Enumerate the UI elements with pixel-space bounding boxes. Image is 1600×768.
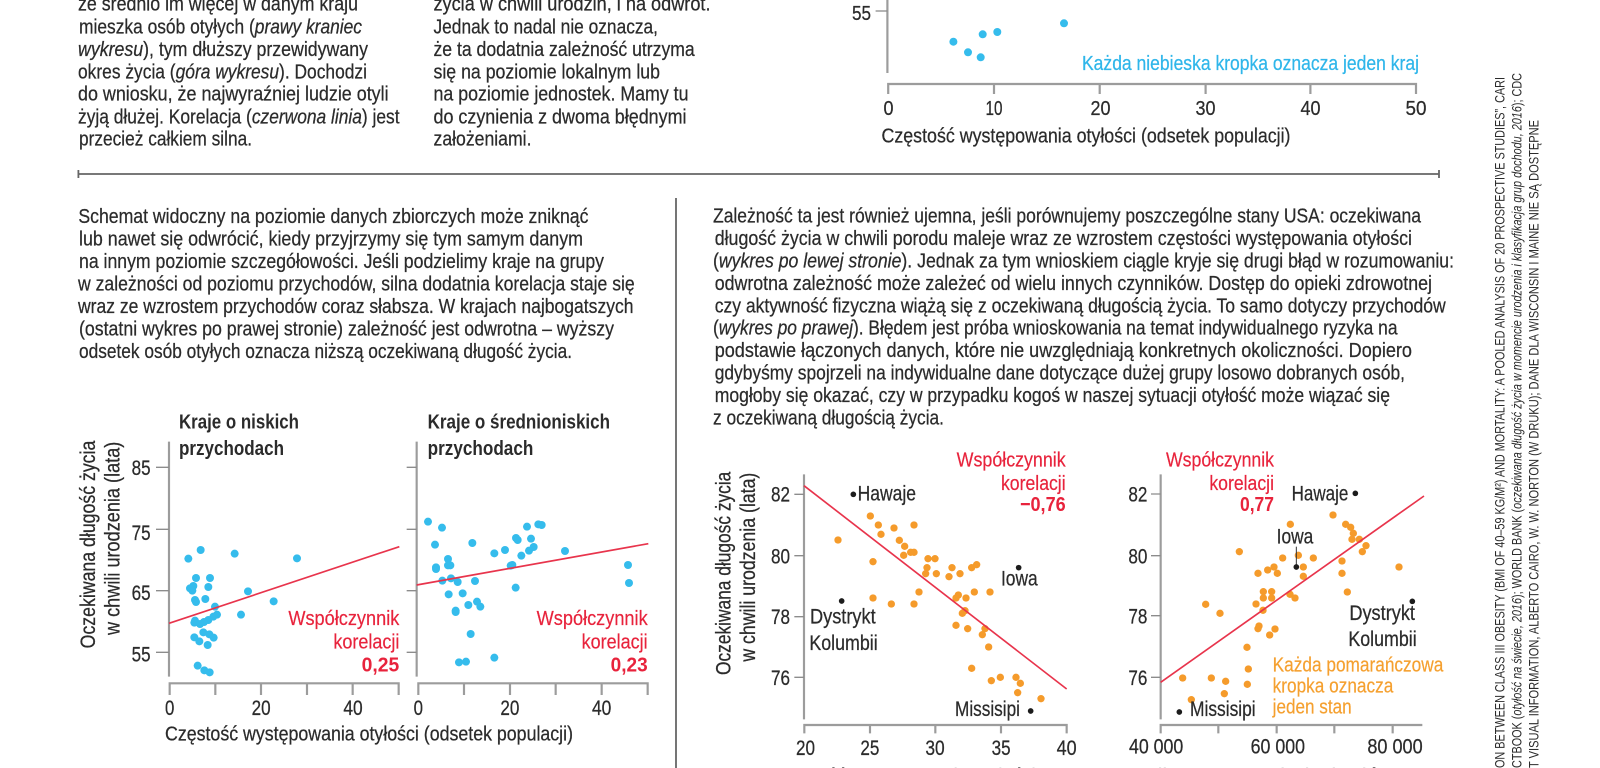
highlighted states [1176,490,1415,715]
text block: right lower paragraph [713,205,1454,429]
text block: top middle paragraph: że ta dodatnia zależność utrzyma [434,38,695,61]
data points: states [1179,511,1403,703]
y axis: 65 [132,582,151,605]
text block: top middle paragraph: do czynienia z dwoma błędnymi [434,105,686,128]
state labels: Missisipi [1190,698,1256,721]
text block: left lower paragraph: w zależności od poziomu przychodów, silna dodatnia korelacja staje się [77,272,635,296]
correlation label -0,76: Współczynnik [957,449,1066,472]
text block: left lower paragraph: Schemat widoczny na poziomie danych zbiorczych może zniknąć [78,205,588,228]
text block: top left paragraph: żyją dłużej. Korelacja (czerwona linia) jest [78,105,400,128]
chart: all countries scatter (bottom of chart): 40 [1300,97,1320,120]
x axis [1129,725,1423,758]
chart: all countries scatter (bottom of chart) [852,0,1426,148]
text block: top left paragraph: przecież całkiem silna. [79,128,252,150]
text block: left lower paragraph: na innym poziomie szczegółowości. Jeśli podzielimy kraje na grupy [79,250,605,273]
chart: all countries scatter (bottom of chart): Częstość występowania otyłości (odsetek populacji) [882,124,1290,148]
vertical column divider [675,198,677,768]
text block: top middle paragraph: założeniami. [434,128,532,150]
y axis [132,442,169,677]
text block: top middle paragraph: się na poziomie lokalnym lub [434,60,660,83]
chart: all countries scatter (bottom of chart): 10 [986,97,1002,120]
state labels: Iowa [1277,525,1314,548]
text block: right lower paragraph: podstawie łączonych danych, które nie uwzględniają konkretnych okoliczności. Dopiero [715,339,1412,362]
horizontal section divider [78,170,1439,178]
y axis [407,442,417,677]
text block: left lower paragraph: wraz ze wzrostem przychodów coraz słabsza. W krajach najbogatszych [77,295,633,318]
x axis: 40 [1057,737,1077,760]
text block: top left paragraph: mieszka osób otyłych (prawy kraniec [79,15,363,38]
sources, rotated text: T VISUAL INFORMATION, ALBERTO CAIRO, W. W. NORTON (W DRUKU); DANE DLA WISCONSIN I MAINE NIE SĄ DOSTĘPNE [1526,120,1541,768]
x axis: 20 [252,697,271,720]
text block: right lower paragraph: Zależność ta jest również ujemna, jeśli porównujemy poszczególne stany USA: oczekiwana [713,205,1422,228]
chart: lower-middle income countries [407,411,648,720]
x axis: 20 [500,697,519,720]
chart title: lower-middle income: Kraje o średnioniskich [428,411,610,433]
correlation label 0,23: korelacji [582,630,648,653]
correlation label 0,25: 0,25 [362,654,399,677]
y axis [771,474,804,719]
x axis: 20 [796,737,815,760]
chart title: low income: przychodach [179,438,284,460]
data points: low income [184,546,301,676]
correlation label -0,76 [957,449,1066,516]
x axis [165,683,399,720]
y axis: 75 [132,522,151,545]
state labels: Hawaje [1292,483,1348,506]
text block: left lower paragraph: (ostatni wykres po prawej stronie) zależność jest odwrotna – wyższy [79,318,615,340]
state labels: Hawaje [858,483,916,506]
x axis: 40 [592,697,611,720]
y axis title [713,471,760,675]
y axis: 85 [132,457,151,480]
state labels: Kolumbii [1348,628,1417,651]
x axis: 60 000 [1251,735,1305,758]
text block: top left paragraph: okres życia (góra wykresu). Dochodzi [78,60,367,83]
y axis: 82 [1128,484,1147,507]
text block: top left paragraph: wykresu), tym dłuższy przewidywany [78,38,369,61]
legend: orange dot meaning [1272,654,1444,718]
legend: orange dot meaning: Każda pomarańczowa [1273,654,1444,677]
highlighted states [839,491,1033,714]
correlation label 0,77: korelacji [1209,472,1274,495]
x axis: 40 000 [1129,735,1183,758]
y axis: 80 [1128,545,1147,568]
x axis [796,725,1077,760]
correlation label 0,77: 0,77 [1240,493,1274,516]
y axis: 55 [132,644,151,667]
text block: right lower paragraph: gdybyśmy spojrzeli na indywidualne dane dotyczące dużej grupy losowo dobranych osób, [715,362,1405,384]
x axis: 25 [860,737,879,760]
chart: all countries scatter (bottom of chart): 0 [884,97,894,120]
y axis title [77,440,124,648]
chart: all countries scatter (bottom of chart): 50 [1406,97,1426,120]
sources, rotated text: CTBOOK (otyłość na świecie, 2016); WORLD BANK (oczekiwana długość życia w momencie urodzenia i klasyfikacja grup dochodu, 2016); CDC [1510,73,1525,768]
chart title: low income [179,411,299,460]
chart: US states, income vs life expectancy [1122,449,1444,768]
chart: all countries scatter (bottom of chart): 20 [1090,97,1110,120]
chart: US states, obesity vs life expectancy [713,449,1077,768]
correlation label -0,76: korelacji [1001,472,1066,495]
trend line [417,544,648,585]
x axis: 0 [165,697,174,720]
state labels: Missisipi [955,698,1020,721]
y axis: 82 [771,484,790,507]
y axis title: w chwili urodzenia (lata) [101,442,124,636]
correlation label 0,23: Współczynnik [537,607,648,630]
sources, rotated text [1492,73,1541,768]
y axis: 80 [771,545,790,568]
text block: top middle paragraph: na poziomie jednostek. Mamy tu [434,83,688,106]
x axis title: income group charts: Częstość występowania otyłości (odsetek populacji) [165,723,573,746]
text block: right lower paragraph: odwrotna zależność może zależeć od wielu innych czynników. Dostęp do opieki zdrowotnej [715,272,1432,295]
chart: all countries scatter (bottom of chart): 30 [1196,97,1216,120]
y axis title: Oczekiwana długość życia [77,440,100,648]
y axis title: w chwili urodzenia (lata) [737,473,760,663]
chart: all countries scatter (bottom of chart): 55 [852,2,871,25]
text block: left lower paragraph: odsetek osób otyłych oznacza niższą oczekiwaną długość życia. [79,340,572,363]
text block: left lower paragraph: lub nawet się odwrócić, kiedy przyjrzymy się tym samym danym [79,228,583,250]
legend: blue dot meaning: Każda niebieska kropka oznacza jeden kraj [1082,52,1419,75]
y axis: 76 [771,667,790,690]
x axis: 30 [925,737,945,760]
text block: right lower paragraph: mogłoby się okazać, czy w przypadku kogoś w naszej sytuacji otyłość może wiązać się [715,384,1390,407]
text block: top left paragraph: do wniosku, że najwyraźniej ludzie otyli [78,83,389,106]
correlation label 0,23 [537,607,648,677]
data points: states [834,512,1045,702]
text block: right lower paragraph: długość życia w chwili porodu maleje wraz ze wzrostem częstości występowania otyłości [715,227,1412,250]
legend: orange dot meaning: jeden stan [1272,695,1352,718]
trend line [1161,496,1424,682]
x axis: 80 000 [1367,735,1423,758]
chart title: low income: Kraje o niskich [179,411,299,433]
chart: low income countries [77,411,400,720]
x axis: 35 [992,737,1011,760]
correlation label 0,77: Współczynnik [1166,449,1275,472]
y axis: 78 [771,606,790,629]
correlation label 0,25: Współczynnik [288,607,400,630]
state labels: Kolumbii [809,632,878,655]
state labels: Dystrykt [1349,602,1415,625]
y axis title: Oczekiwana długość życia [713,471,736,675]
trend line [804,486,1067,689]
correlation label 0,23: 0,23 [611,654,648,677]
correlation label 0,25 [288,607,400,677]
x axis [414,683,648,720]
x axis: 0 [414,697,423,720]
correlation label -0,76: −0,76 [1020,493,1066,516]
data points: lower-middle income [424,518,633,666]
trend line [169,547,399,623]
text block: top middle paragraph [434,0,710,151]
text block: top middle paragraph: Jednak to nadal nie oznacza, [434,15,658,38]
correlation label 0,25: korelacji [333,630,399,653]
y axis: 76 [1128,667,1147,690]
text block: right lower paragraph: (wykres po lewej stronie). Jednak za tym wnioskiem ciągle kryje się drugi błąd w rozumowaniu: [713,250,1454,272]
legend: orange dot meaning: kropka oznacza [1273,674,1394,697]
text block: top left paragraph [78,0,400,151]
text block: right lower paragraph: (wykres po prawej). Błędem jest próba wnioskowania na temat indywidualnego ryzyka na [713,317,1398,340]
state labels: Iowa [1001,568,1038,591]
text block: right lower paragraph: czy aktywność fizyczna wiążą się z oczekiwaną długością życia. To samo dotyczy przychodów [715,294,1446,317]
chart title: lower-middle income: przychodach [428,438,533,460]
state labels [1190,483,1417,721]
y axis [1128,474,1161,719]
correlation label 0,77 [1166,449,1275,516]
text block: right lower paragraph: z oczekiwaną długością życia. [713,406,944,429]
text block: left lower paragraph [77,205,635,363]
y axis: 78 [1128,605,1147,628]
chart title: lower-middle income [428,411,610,460]
state labels [809,483,1038,721]
x axis: 40 [343,697,363,720]
state labels: Dystrykt [810,605,876,628]
